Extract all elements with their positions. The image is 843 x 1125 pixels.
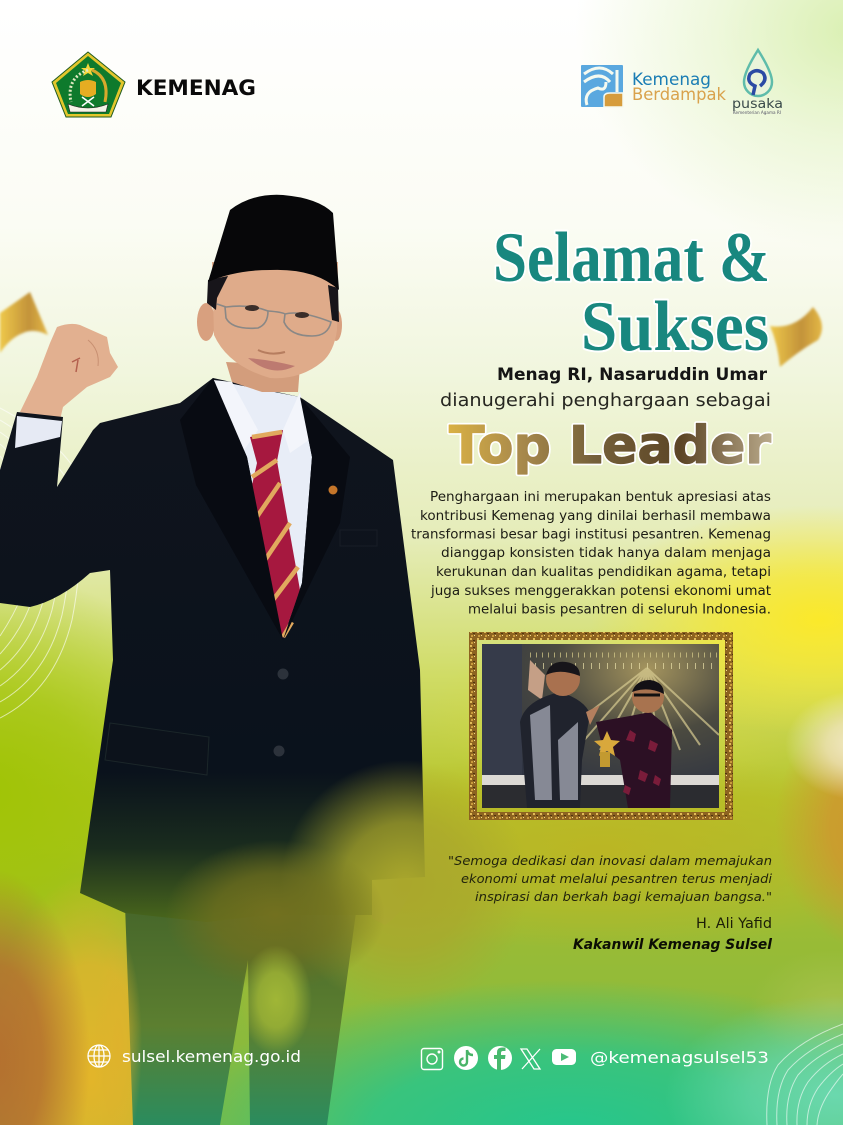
- jacket: [0, 378, 425, 922]
- gradient fade over figure: [94, 760, 530, 1125]
- contour lines left: [0, 408, 81, 718]
- body paragraph: transformasi besar bagi institusi pesantren. Kemenag: [411, 528, 771, 542]
- tie: [248, 430, 300, 638]
- quote: "Semoga dedikasi dan inovasi dalam memajukan: [448, 854, 772, 869]
- logo: Kemenag Berdampak: [581, 65, 726, 107]
- trousers: [125, 905, 357, 1125]
- icon: Berdampak mark: [581, 65, 623, 107]
- icon: instagram: [422, 1048, 442, 1070]
- title: Selamat & Sukses: [493, 219, 770, 366]
- face: [197, 262, 342, 378]
- recipient name: Menag RI, Nasaruddin Umar: [497, 365, 768, 384]
- body paragraph: kontribusi Kemenag yang dinilai berhasil membawa: [420, 509, 771, 524]
- quote: inspirasi dan berkah bagi kemajuan bangsa.": [475, 890, 772, 905]
- quote author name: H. Ali Yafid: [696, 916, 772, 932]
- logo: Kemenag Berdampak: Berdampak: [632, 85, 726, 104]
- award title: Top Leader: Top Leader: [449, 416, 771, 476]
- icon: tiktok: [454, 1046, 478, 1070]
- figure: minister: [0, 195, 425, 1125]
- quote: ekonomi umat melalui pesantren terus menjadi: [461, 872, 772, 887]
- logo: Pusaka: Kementerian Agama RI: [733, 110, 781, 115]
- right man: [596, 680, 672, 808]
- light rays: [530, 655, 719, 755]
- title: Selamat & Sukses: Selamat &: [493, 219, 770, 297]
- brand name: KEMENAG: KEMENAG: [136, 76, 256, 100]
- body paragraph: dianggap konsisten tidak hanya dalam menjaga: [441, 546, 771, 561]
- forearm and fist: [20, 324, 118, 420]
- social icons: [422, 1046, 576, 1070]
- hair: [207, 276, 339, 322]
- logo: Pusaka: [732, 50, 783, 115]
- trophy: [594, 731, 620, 767]
- award title: Top Leader: Top Leader: [449, 416, 771, 476]
- contour lines bottom right: [767, 1024, 843, 1125]
- logo: Kemenag Berdampak: Kemenag: [632, 70, 711, 89]
- quote author role: Kakanwil Kemenag Sulsel: [573, 937, 772, 953]
- icon: youtube: [552, 1049, 576, 1065]
- pin: [328, 486, 338, 494]
- body paragraph: [411, 490, 771, 618]
- subtitle: dianugerahi penghargaan sebagai: [440, 391, 771, 411]
- quote: [448, 854, 772, 905]
- left hand: [370, 878, 412, 925]
- decorative ribbon left: [0, 292, 48, 353]
- framed award photo: [473, 636, 729, 816]
- shirt cuff: [15, 416, 62, 448]
- lapels: [180, 378, 350, 640]
- icon: facebook: [488, 1046, 512, 1070]
- body paragraph: kerukunan dan kualitas pendidikan agama, tetapi: [436, 565, 771, 580]
- body paragraph: Penghargaan ini merupakan bentuk apresiasi atas: [430, 490, 771, 505]
- icon: globe: [88, 1045, 110, 1067]
- logo: Pusaka: pusaka: [732, 97, 783, 112]
- neck: [226, 362, 300, 392]
- body paragraph: juga sukses menggerakkan potensi ekonomi umat: [430, 584, 771, 599]
- website: sulsel.kemenag.go.id: [122, 1047, 301, 1066]
- decorative ribbon right: [770, 307, 822, 367]
- jacket pockets and buttons: [105, 530, 377, 775]
- peci hat: [208, 195, 339, 290]
- shirt: [213, 380, 312, 638]
- icon: X: [521, 1049, 540, 1069]
- title: Selamat & Sukses: Sukses: [581, 288, 769, 366]
- social handle: @kemenagsulsel53: [590, 1048, 769, 1067]
- collar: [213, 380, 309, 453]
- glasses: [217, 304, 331, 336]
- body paragraph: melalui basis pesantren di seluruh Indonesia.: [468, 602, 771, 618]
- left man: [520, 660, 600, 808]
- logo: Kemenag emblem: [52, 52, 125, 117]
